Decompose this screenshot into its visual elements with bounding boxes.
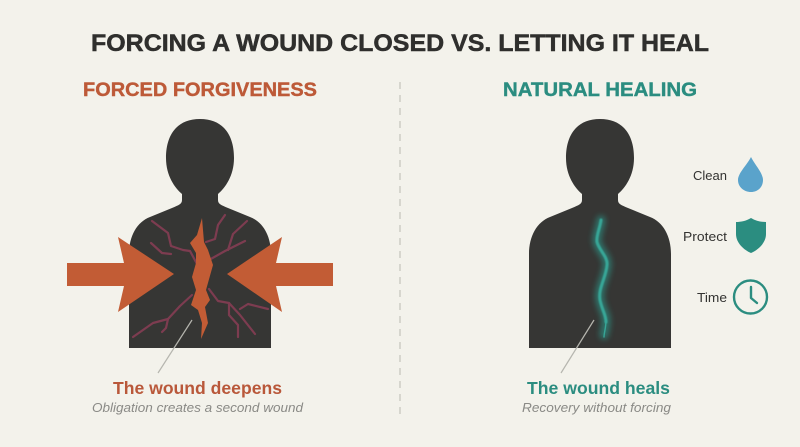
- title: FORCING A WOUND CLOSED VS. LETTING IT HEAL: [91, 30, 709, 57]
- caption: the wound deepens: The wound deepens: [113, 378, 282, 398]
- subcaption: Obligation creates a second wound: [92, 400, 304, 415]
- icon: clock: [734, 280, 767, 314]
- caption: the wound heals: The wound heals: [527, 378, 670, 398]
- wound: orange crack: [190, 218, 213, 339]
- item: clean: Clean: [693, 168, 727, 183]
- subcaption: Recovery without forcing: [522, 400, 672, 415]
- silhouette: right figure: [529, 119, 671, 348]
- icon: shield: [736, 218, 766, 253]
- heading: natural healing: NATURAL HEALING: [503, 79, 697, 101]
- item: time: [697, 280, 767, 314]
- panel: forced forgiveness: [67, 79, 333, 415]
- pointer line: [158, 320, 192, 373]
- arrow: left pressing in: [67, 237, 174, 312]
- item: protect: [683, 218, 766, 253]
- healing seam glow: [597, 220, 607, 337]
- item: time: Time: [697, 290, 727, 305]
- pointer line: [561, 320, 594, 373]
- heading: forced forgiveness: FORCED FORGIVENESS: [83, 79, 317, 101]
- item: protect: Protect: [683, 229, 727, 244]
- arrow: right pressing in: [227, 237, 333, 312]
- panel: natural healing: [503, 79, 697, 415]
- cracks radiating from wound: [133, 215, 268, 337]
- icon: water drop: [738, 157, 763, 192]
- silhouette: left figure: [129, 119, 271, 348]
- item: clean: [693, 157, 763, 192]
